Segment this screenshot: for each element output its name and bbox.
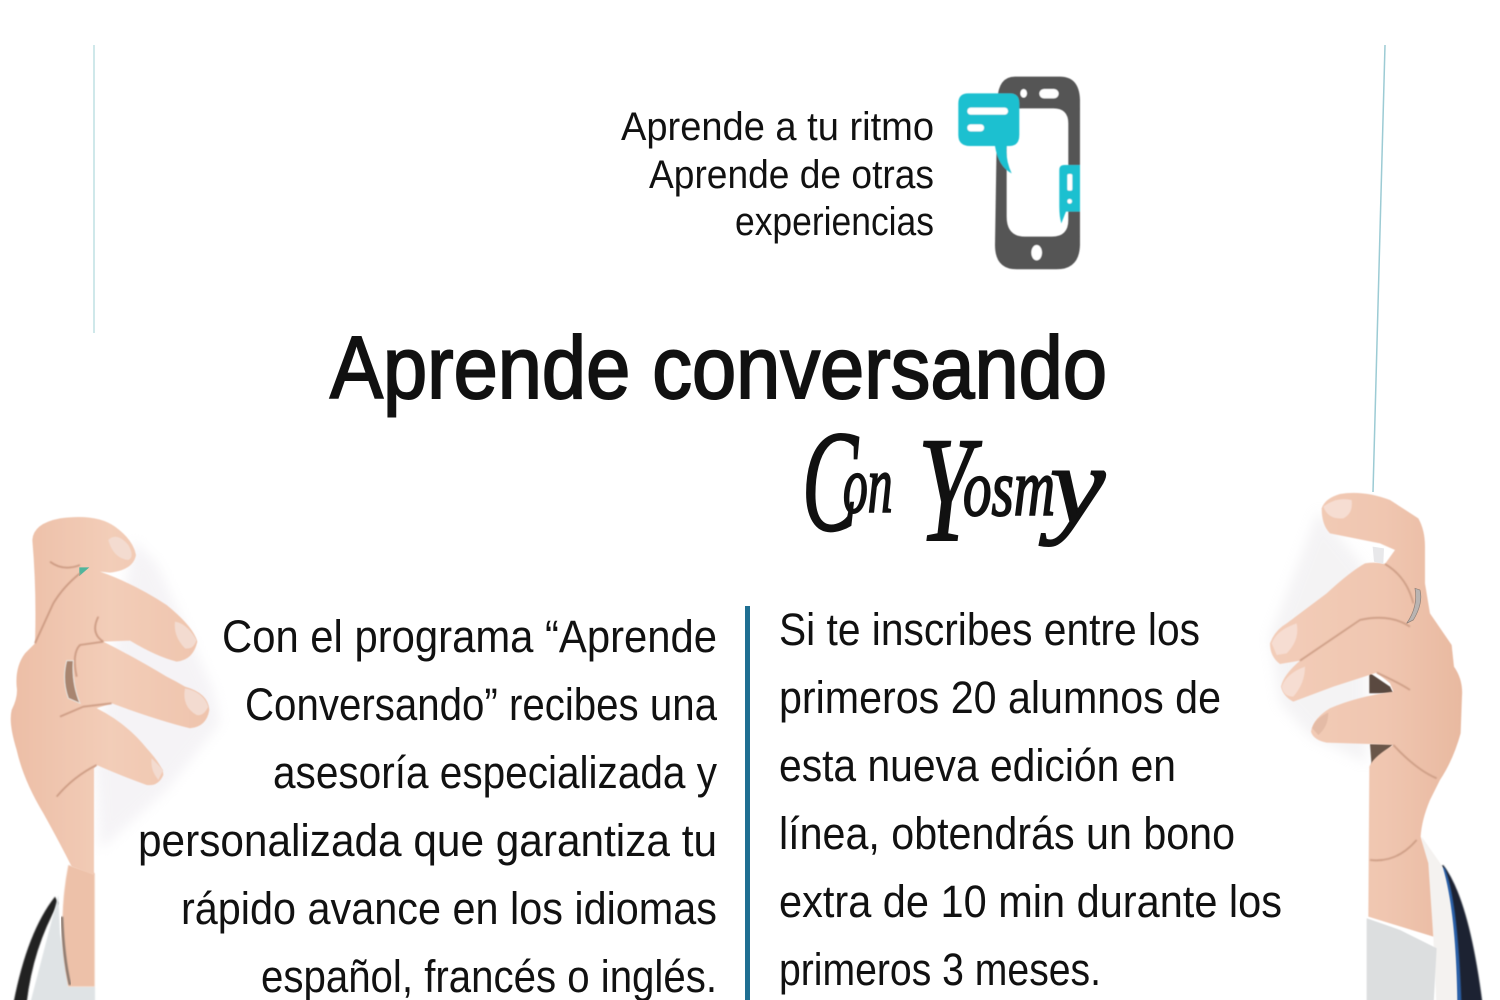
ring [65, 661, 80, 703]
dark gap [1369, 673, 1393, 693]
left column text: Con el programa “Aprende [222, 611, 717, 662]
finger creases [1300, 564, 1437, 860]
left column text: asesoría especializada y [273, 747, 717, 798]
hand shape [1270, 493, 1462, 937]
column divider [745, 606, 750, 1000]
ring [1407, 588, 1421, 623]
paper sheet edges [94, 45, 1385, 492]
phone body [995, 77, 1080, 269]
hand shape [11, 517, 209, 875]
header tagline [621, 105, 934, 244]
right column text: esta nueva edición en [779, 740, 1176, 791]
script subtitle: on [843, 439, 905, 530]
right column text: extra de 10 min durante los [779, 876, 1282, 927]
right hand [1270, 493, 1483, 1000]
shirt cuff [25, 895, 95, 1000]
left column text: Conversando” recibes una [245, 679, 718, 730]
icon: phone with chat bubbles [958, 77, 1080, 269]
white collar [1422, 837, 1457, 1000]
left column text: personalizada que garantiza tu [138, 815, 717, 866]
title: Aprende conversando [330, 318, 1107, 417]
right column text: primeros 3 meses. [779, 944, 1101, 995]
right column text [779, 604, 1282, 995]
finger creases [35, 562, 112, 797]
header tagline: experiencias [735, 200, 934, 244]
small alert bubble [1059, 165, 1080, 223]
left hand [10, 517, 220, 1000]
left column text: rápido avance en los idiomas [181, 883, 717, 934]
right column text: línea, obtendrás un bono [779, 808, 1235, 859]
header tagline: Aprende de otras [649, 153, 934, 197]
header tagline: Aprende a tu ritmo [621, 105, 934, 149]
shirt cuff [1367, 918, 1437, 1000]
nails [108, 537, 208, 780]
finger gap [1373, 547, 1384, 564]
nails [1272, 499, 1352, 735]
jacket [1440, 865, 1483, 1000]
jacket [10, 897, 58, 1000]
right column text: Si te inscribes entre los [779, 604, 1200, 655]
script subtitle: Y [918, 407, 982, 573]
right column text: primeros 20 alumnos de [779, 672, 1221, 723]
finger shadow [95, 540, 220, 850]
wrist [62, 865, 95, 987]
large chat bubble [958, 93, 1019, 173]
script subtitle: osm [963, 442, 1055, 533]
left column text [138, 611, 718, 1000]
finger shadow [1270, 510, 1367, 763]
script subtitle: C [802, 402, 859, 562]
teal gap [79, 567, 89, 576]
paper edge [1367, 673, 1372, 903]
script subtitle: y [1039, 424, 1105, 546]
